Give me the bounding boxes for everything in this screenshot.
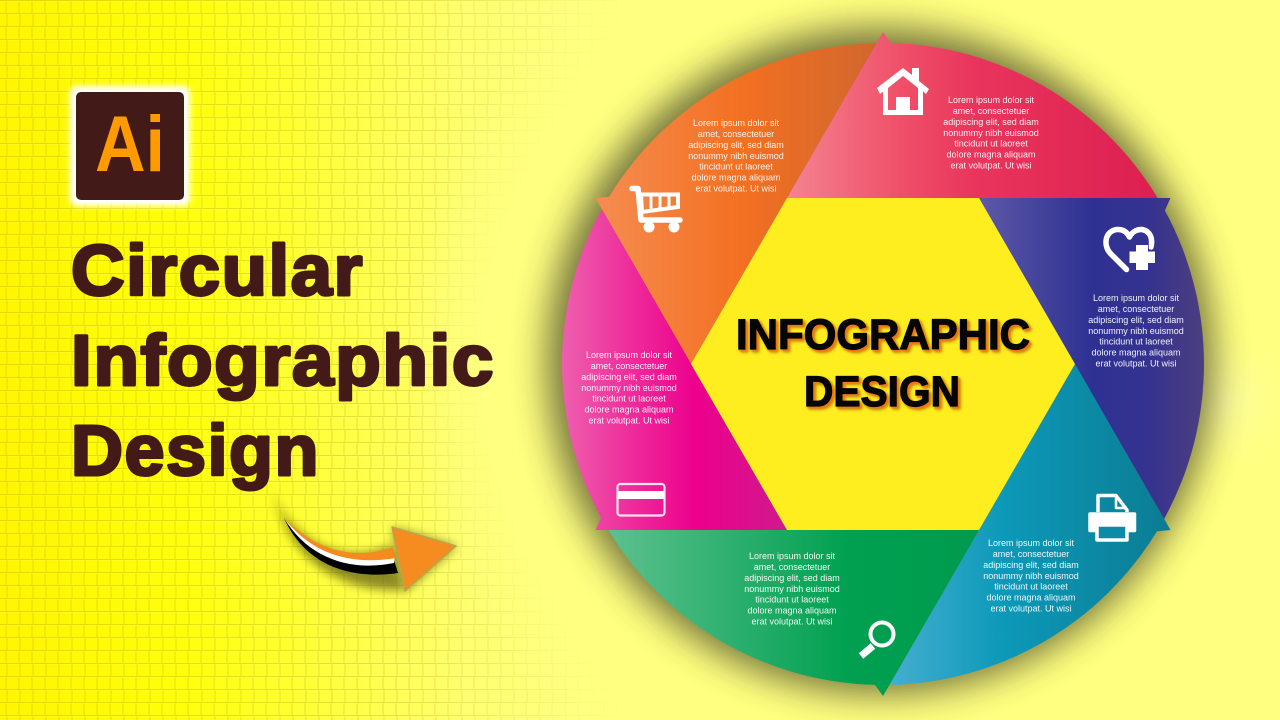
text block: red: dolore magna aliquam <box>946 150 1036 160</box>
text block: teal: Lorem ipsum dolor sit <box>988 538 1075 548</box>
text block: blue <box>1088 293 1184 368</box>
text block: magenta: amet, consectetuer <box>591 361 667 371</box>
icon: magnifier <box>861 622 894 656</box>
text block: teal: adipiscing elit, sed diam <box>983 560 1079 570</box>
text block: green: amet, consectetuer <box>754 562 830 572</box>
text block: red: tincidunt ut laoreet <box>954 138 1028 148</box>
icon: printer <box>1090 496 1134 540</box>
text block: magenta: Lorem ipsum dolor sit <box>586 350 673 360</box>
icon: heart with plus <box>1106 229 1155 270</box>
text block: green: Lorem ipsum dolor sit <box>749 551 836 561</box>
text block: red <box>943 95 1039 170</box>
text block: teal: dolore magna aliquam <box>986 592 1076 602</box>
icon: house <box>877 68 929 115</box>
text block: teal <box>983 538 1079 614</box>
panel: blue segment <box>979 198 1204 519</box>
text block: green: tincidunt ut laoreet <box>755 594 829 604</box>
text block: green <box>744 551 840 626</box>
text block: blue: erat volutpat. Ut wisi <box>1095 358 1177 368</box>
title <box>71 232 495 491</box>
text block: green: erat volutpat. Ut wisi <box>751 616 833 626</box>
heading: infographic design <box>736 311 1030 416</box>
heading: infographic design: INFOGRAPHIC <box>736 311 1030 359</box>
text block: teal: erat volutpat. Ut wisi <box>990 604 1072 614</box>
text block: blue: dolore magna aliquam <box>1091 348 1181 358</box>
text block: orange: tincidunt ut laoreet <box>699 162 773 172</box>
text block: teal: nonummy nibh euismod <box>983 571 1079 581</box>
text block: teal: tincidunt ut laoreet <box>994 582 1068 592</box>
text block: red: nonummy nibh euismod <box>943 128 1039 138</box>
text block: red: amet, consectetuer <box>953 106 1029 116</box>
text block: orange: erat volutpat. Ut wisi <box>695 184 777 194</box>
icon: credit card <box>618 484 664 516</box>
title: Circular <box>71 232 364 311</box>
text block: blue: nonummy nibh euismod <box>1088 326 1184 336</box>
text block: orange: dolore magna aliquam <box>691 172 781 182</box>
text block: magenta <box>581 350 677 426</box>
text block: red: Lorem ipsum dolor sit <box>948 95 1035 105</box>
panel: orange segment <box>596 43 877 364</box>
text block: blue: amet, consectetuer <box>1098 304 1174 314</box>
text block: orange: nonummy nibh euismod <box>688 151 784 161</box>
text block: magenta: adipiscing elit, sed diam <box>581 372 677 382</box>
text block: green: nonummy nibh euismod <box>744 584 840 594</box>
text block: teal: amet, consectetuer <box>993 549 1069 559</box>
panel: green segment <box>608 530 979 696</box>
text block: orange <box>688 118 784 194</box>
arrow <box>272 488 457 592</box>
text block: orange: adipiscing elit, sed diam <box>688 140 784 150</box>
text block: red: erat volutpat. Ut wisi <box>950 160 1032 170</box>
icon: Adobe Illustrator logo <box>70 86 190 206</box>
icon: shopping cart <box>632 188 680 232</box>
text block: magenta: dolore magna aliquam <box>584 404 674 414</box>
text block: green: adipiscing elit, sed diam <box>744 573 840 583</box>
text block: red: adipiscing elit, sed diam <box>943 117 1039 127</box>
title: Design <box>71 412 320 491</box>
circle shadow <box>547 28 1213 694</box>
text block: blue: tincidunt ut laoreet <box>1099 336 1173 346</box>
panel: central hexagon <box>691 198 1075 530</box>
icon: Adobe Illustrator logo: Ai <box>95 99 165 188</box>
text block: magenta: nonummy nibh euismod <box>581 383 677 393</box>
panel: teal segment <box>889 364 1170 685</box>
text block: orange: Lorem ipsum dolor sit <box>693 118 780 128</box>
text block: orange: amet, consectetuer <box>698 129 774 139</box>
text block: magenta: erat volutpat. Ut wisi <box>588 416 670 426</box>
text block: blue: Lorem ipsum dolor sit <box>1093 293 1180 303</box>
text block: magenta: tincidunt ut laoreet <box>592 394 666 404</box>
heading: infographic design: DESIGN <box>804 368 960 416</box>
text block: blue: adipiscing elit, sed diam <box>1088 315 1184 325</box>
panel: magenta segment <box>562 209 787 530</box>
text block: green: dolore magna aliquam <box>747 606 837 616</box>
panel: red segment <box>787 32 1158 198</box>
title: Infographic <box>71 322 495 401</box>
